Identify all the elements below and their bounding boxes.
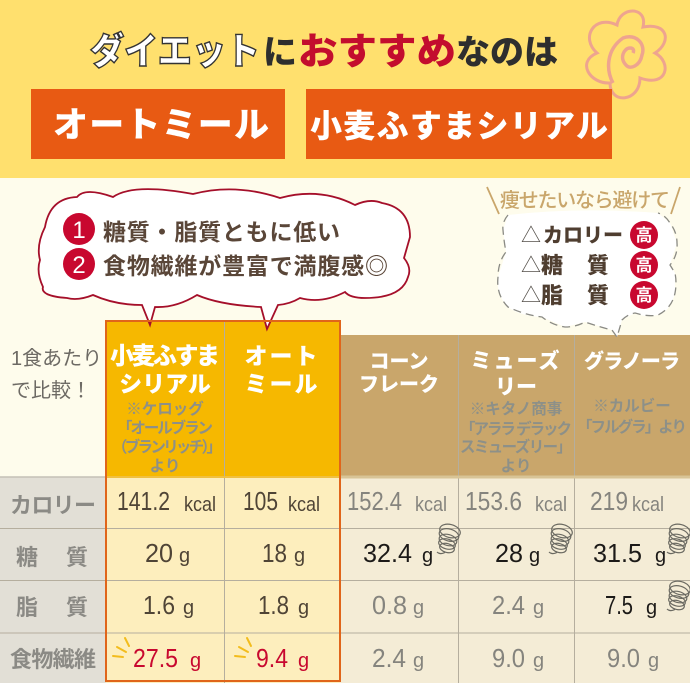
column header: muesli: より [501,457,531,475]
speech bubble: benefits [39,189,410,329]
fat row [143,590,657,620]
per-serving note: で比較！ [11,379,91,402]
column header: muesli: スミューズリー」 [460,437,572,456]
column header: muesli [460,349,572,475]
dietary fibre row: g [533,650,544,672]
highlighted column outline [106,321,340,681]
fat row: g [298,597,309,619]
carbohydrate row [145,538,666,568]
item 2: 食物繊維が豊富で満腹感◎ [103,253,388,279]
column header: wheat bran cereal [110,343,222,475]
row: carbohydrate high [521,251,658,279]
item 2: 2 [72,252,86,279]
row labels [10,493,96,672]
carbohydrate row: g [179,545,190,567]
carbohydrate row: 28 [495,538,523,568]
column header: oatmeal: ミール [244,371,320,397]
fat row: g [183,597,194,619]
row labels: 糖 [16,545,38,570]
row: carbohydrate high: 質 [587,253,609,278]
column header: granola [577,349,687,436]
calorie row: 219 [590,486,628,516]
fat row: 7.5 [605,590,633,620]
title: おすすめ [298,31,456,72]
calorie row: kcal [632,494,664,516]
dashed speech bubble: foods to avoid [487,187,680,337]
column header: wheat bran cereal: 小麦ふすま [110,343,220,370]
dietary fibre row: 9.4 [256,643,288,673]
row: carbohydrate high: △ [521,254,541,277]
title [90,30,558,72]
dietary fibre row: g [648,650,659,672]
fat row: 1.6 [143,590,175,620]
item 1 [63,213,340,245]
row: fat high: 質 [587,283,609,308]
carbohydrate row: g [655,545,666,567]
calorie row: 105 [243,486,278,516]
carbohydrate row: 20 [145,538,173,568]
per-serving note: 1食あたり [11,347,102,370]
table header background [106,321,690,477]
icon: flower swirl [587,11,665,98]
dietary fibre row: 2.4 [372,643,406,673]
dietary fibre row: g [413,650,424,672]
carbohydrate row: g [422,545,433,567]
carbohydrate row: 18 [262,538,287,568]
recommendation box: oatmeal [31,89,285,159]
row: carbohydrate high: 糖 [541,253,563,278]
dietary fibre row: g [190,650,201,672]
row labels: 食物繊維 [10,647,96,672]
row: calories high [521,221,658,249]
title: ダイエット [90,30,260,72]
recommendation box: wheat bran cereal: 小麦ふすまシリアル [310,108,608,144]
column header: corn flakes: フレーク [359,373,439,396]
avoid heading: 痩せたいなら避けて [500,189,670,212]
column header: muesli: リー [495,376,537,399]
calorie row: 153.6 [465,486,522,516]
calorie row: kcal [415,494,447,516]
column header: corn flakes: コーン [370,351,428,373]
calorie row: kcal [535,494,567,516]
column header: wheat bran cereal: より [150,457,180,475]
column header: wheat bran cereal: シリアル [119,371,211,397]
row: calories high: 高 [636,225,652,245]
row: carbohydrate high: 高 [636,255,652,275]
row labels: カロリー [10,493,96,518]
item 1: 1 [72,217,86,244]
calorie row: 152.4 [347,486,402,516]
fat row: g [646,597,657,619]
column header: muesli: ※キタノ商事 [470,399,562,418]
title: なのは [456,34,558,72]
recommendation box: oatmeal: オートミール [53,106,269,145]
column header: muesli: ミューズ [471,349,561,373]
calorie row [117,486,664,516]
carbohydrate row: 32.4 [363,538,412,568]
column header: muesli: 「アララ デラック [460,419,572,438]
carbohydrate row: g [529,545,540,567]
fat row: g [413,597,424,619]
row: calories high: △ [521,224,541,247]
dietary fibre row [133,643,659,673]
column header: wheat bran cereal: 「オールブラン [117,418,213,437]
column header: wheat bran cereal: ※ケロッグ [126,399,204,418]
row labels: 脂 [16,595,38,620]
column header: oatmeal: オート [244,343,320,369]
carbohydrate row: 31.5 [593,538,642,568]
column header: wheat bran cereal: （ブランリッチ）」 [112,437,222,456]
table body backgrounds [0,477,690,683]
row labels: 質 [66,595,88,620]
icon: warning springs [437,522,690,611]
row: fat high: 高 [636,285,652,305]
row: fat high: 脂 [541,283,563,308]
column header: granola: 「フルグラ」より [577,417,687,436]
recommendation box: wheat bran cereal [306,89,612,159]
row labels: 質 [66,545,88,570]
fat row: 2.4 [492,590,525,620]
grid lines [0,321,690,683]
icon: highlight sparks [113,638,251,657]
item 1: 糖質・脂質ともに低い [103,219,340,245]
dietary fibre row: 27.5 [133,643,178,673]
row: fat high: △ [521,284,541,307]
fat row: 1.8 [258,590,289,620]
column header: oatmeal [244,343,320,397]
calorie row: 141.2 [117,486,170,516]
column header: granola: ※カルビー [593,396,671,415]
dietary fibre row: 9.0 [492,643,525,673]
fat row: g [533,597,544,619]
header band [0,0,690,178]
dietary fibre row: g [298,650,309,672]
calorie row: kcal [184,494,216,516]
calorie row: kcal [288,494,320,516]
carbohydrate row: g [294,545,305,567]
column header: granola: グラノーラ [584,349,680,373]
title: に [263,34,297,72]
dietary fibre row: 9.0 [607,643,640,673]
row: fat high [521,281,658,309]
column header: corn flakes [359,351,439,396]
fat row: 0.8 [372,590,407,620]
row: calories high: カロリー [543,225,623,247]
